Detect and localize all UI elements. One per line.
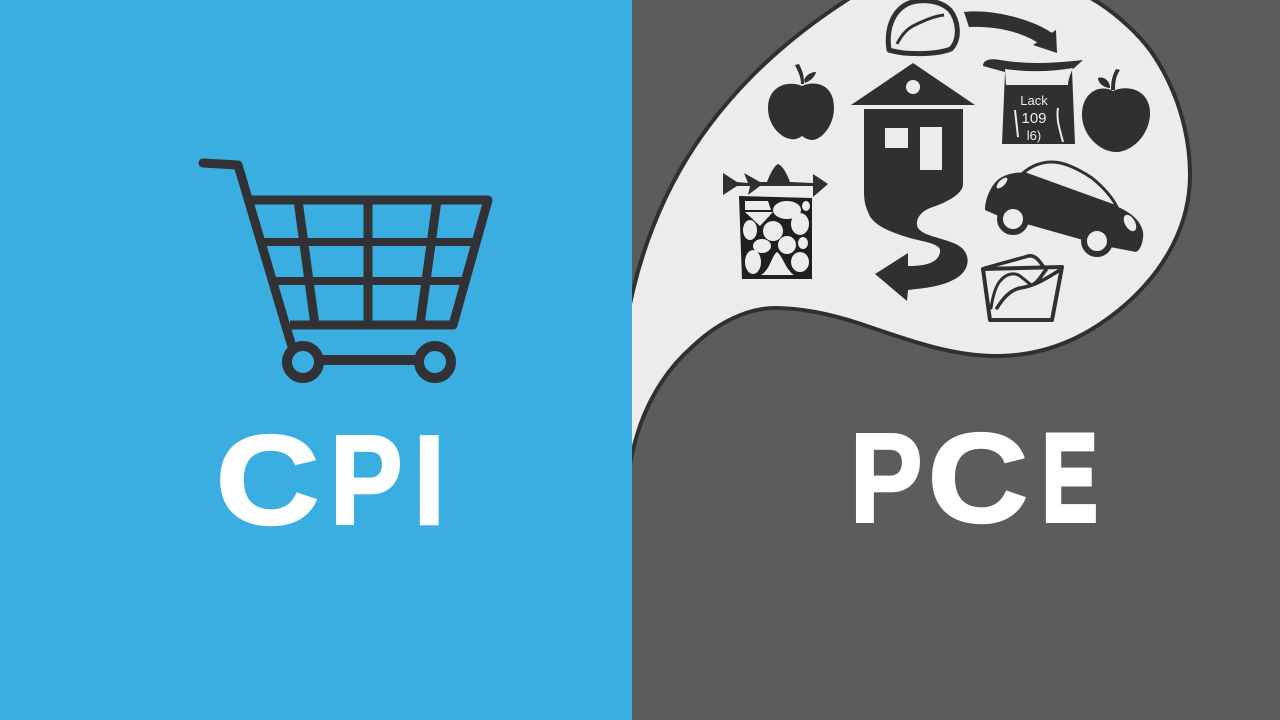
panel: CPI background	[0, 0, 632, 720]
heading: CPI: P	[330, 410, 403, 552]
speech-bubble blob	[622, 0, 1190, 500]
icon: receipt jar: l6)	[1027, 128, 1041, 143]
heading: PCE	[850, 407, 1097, 550]
icon: receipt jar: Lack	[1020, 93, 1048, 108]
icon: curved arrow	[964, 11, 1057, 53]
heading: CPI: C	[216, 408, 319, 551]
icon: apple left	[768, 64, 834, 140]
heading: PCE: P	[850, 408, 923, 550]
icon: receipt jar: 109	[1021, 110, 1047, 127]
heading: PCE: C	[928, 407, 1028, 549]
icon: bread loaf	[888, 1, 957, 54]
icon: shopping cart	[203, 163, 488, 378]
panel: PCE background	[632, 0, 1280, 720]
icon: house with winding road arrow	[851, 63, 975, 301]
icon: gift basket	[723, 164, 828, 279]
icon: car	[985, 162, 1143, 254]
heading: PCE: E	[1042, 409, 1097, 548]
heading: CPI	[216, 408, 445, 552]
heading: CPI: I	[413, 409, 445, 551]
icon: apple right	[1082, 69, 1150, 152]
icon: laundry basket	[983, 256, 1062, 320]
icon: receipt jar	[983, 59, 1083, 144]
